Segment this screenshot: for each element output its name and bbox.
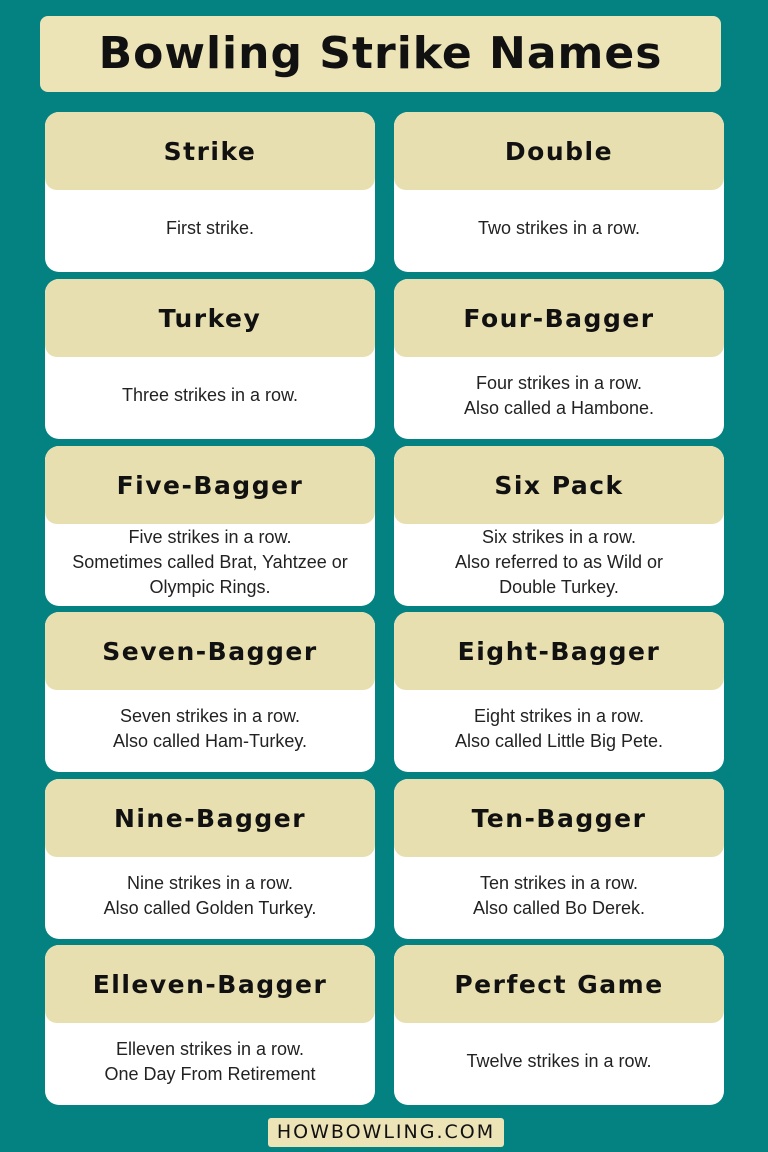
card: Seven-Bagger: Seven strikes in a row. xyxy=(120,706,300,726)
card: Six Pack: Six strikes in a row. xyxy=(482,527,636,547)
card: Six Pack: Also referred to as Wild or xyxy=(455,552,663,572)
card: Nine-Bagger xyxy=(45,779,375,939)
card: Ten-Bagger xyxy=(394,779,724,939)
card: Turkey: Three strikes in a row. xyxy=(122,385,298,405)
card: Elleven-Bagger: Elleven-Bagger xyxy=(93,970,327,999)
card: Elleven-Bagger: Elleven strikes in a row. xyxy=(116,1038,304,1058)
card: Strike: First strike. xyxy=(166,218,254,238)
card: Ten-Bagger: Ten strikes in a row. xyxy=(480,872,638,892)
card: Double: Double xyxy=(505,137,613,166)
card: Seven-Bagger: Also called Ham-Turkey. xyxy=(113,730,307,750)
card: Perfect Game: Perfect Game xyxy=(454,970,664,999)
card: Five-Bagger xyxy=(45,446,375,606)
card: Nine-Bagger: Nine-Bagger xyxy=(114,804,306,833)
card: Seven-Bagger: Seven-Bagger xyxy=(102,637,318,666)
card: Double xyxy=(394,112,724,272)
card: Turkey xyxy=(45,279,375,439)
card: Strike: Strike xyxy=(164,137,256,166)
card: Eight-Bagger: Eight strikes in a row. xyxy=(474,706,644,726)
card: Ten-Bagger: Also called Bo Derek. xyxy=(473,898,645,918)
card: Four-Bagger xyxy=(394,279,724,439)
card: Nine-Bagger: Also called Golden Turkey. xyxy=(104,898,316,918)
card: Four-Bagger: Four strikes in a row. xyxy=(476,372,642,392)
card: Perfect Game xyxy=(394,945,724,1105)
card: Perfect Game: Twelve strikes in a row. xyxy=(466,1051,652,1071)
title xyxy=(40,16,721,92)
card: Five-Bagger: Five-Bagger xyxy=(117,471,303,500)
card: Ten-Bagger: Ten-Bagger xyxy=(472,804,646,833)
card: Four-Bagger: Four-Bagger xyxy=(463,304,655,333)
card: Double: Two strikes in a row. xyxy=(478,218,640,238)
card: Strike xyxy=(45,112,375,272)
card: Seven-Bagger xyxy=(45,612,375,772)
card: Five-Bagger: Five strikes in a row. xyxy=(128,527,292,547)
card: Eight-Bagger xyxy=(394,612,724,772)
card: Six Pack: Six Pack xyxy=(494,471,624,500)
card: Elleven-Bagger xyxy=(45,945,375,1105)
card: Six Pack: Double Turkey. xyxy=(499,577,619,597)
footer: HOWBOWLING.COM xyxy=(277,1121,495,1143)
card: Five-Bagger: Sometimes called Brat, Yahtzee or xyxy=(72,552,348,572)
card: Turkey: Turkey xyxy=(159,304,261,333)
card: Four-Bagger: Also called a Hambone. xyxy=(464,398,654,418)
card: Elleven-Bagger: One Day From Retirement xyxy=(104,1064,316,1084)
card: Five-Bagger: Olympic Rings. xyxy=(149,577,271,597)
title: Bowling Strike Names xyxy=(99,28,662,79)
card: Eight-Bagger: Also called Little Big Pete. xyxy=(455,730,663,750)
card: Six Pack xyxy=(394,446,724,606)
card: Nine-Bagger: Nine strikes in a row. xyxy=(127,872,293,892)
card: Eight-Bagger: Eight-Bagger xyxy=(458,637,660,666)
